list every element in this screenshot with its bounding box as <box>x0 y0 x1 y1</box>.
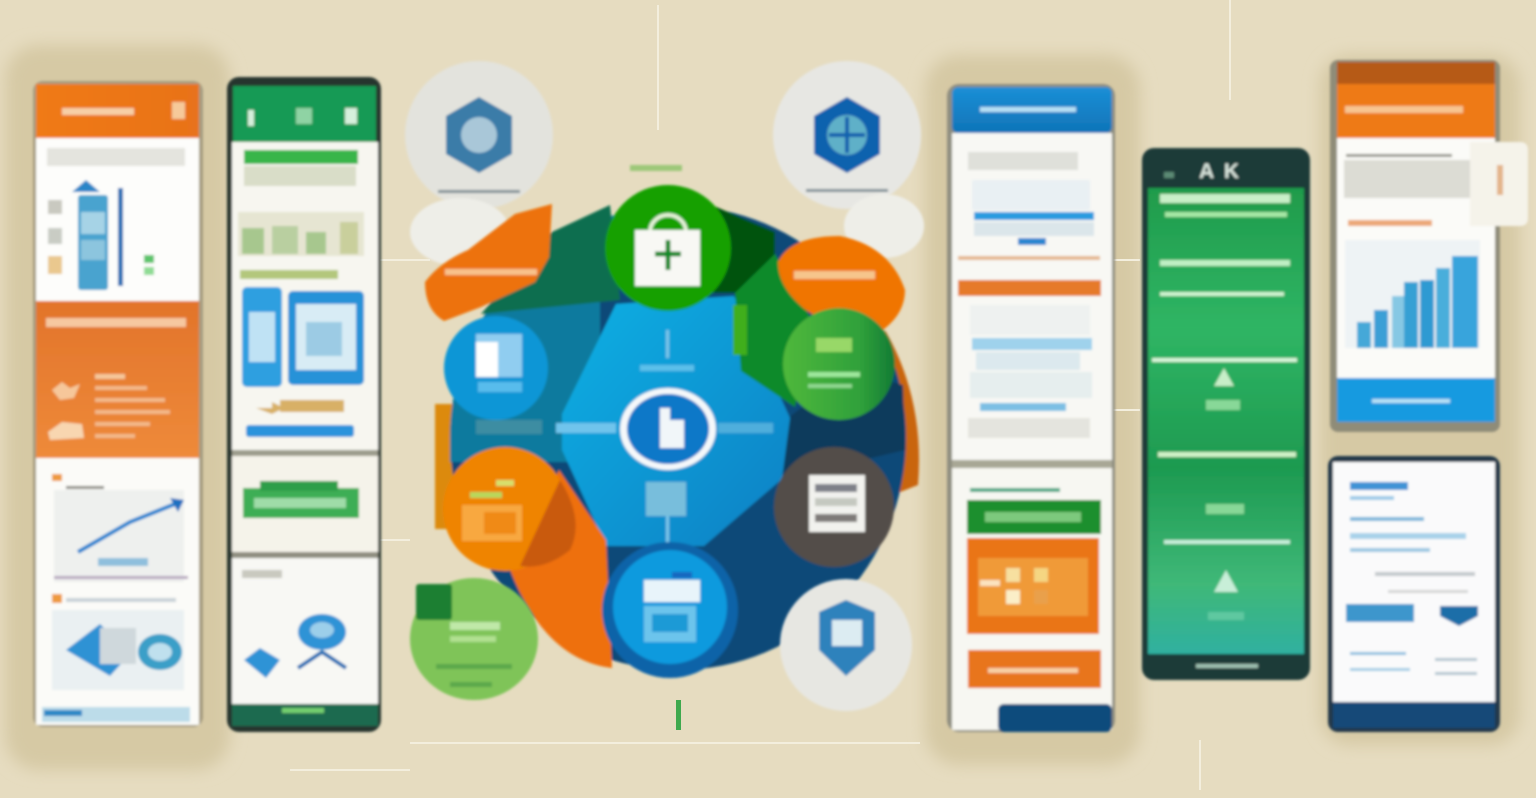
hub teal left half <box>450 206 678 462</box>
hub orange bottom rim <box>596 620 775 670</box>
icon badge: bottom right shield <box>780 579 912 711</box>
panel: right phone 1 <box>947 84 1115 732</box>
right phone 1 diagram <box>972 180 1094 245</box>
panel: far right top card <box>1330 60 1528 432</box>
hub dark green top-left sector <box>481 205 620 314</box>
far right header <box>1337 84 1495 138</box>
phone 1 device illustration <box>48 180 154 290</box>
marker: green tick <box>676 700 681 730</box>
far right text block <box>1344 154 1479 226</box>
hub navy right band <box>782 370 905 479</box>
phone 2 chart band <box>238 212 364 256</box>
right phone 2 icon row 2 <box>1208 570 1244 620</box>
node: blue left <box>444 316 548 420</box>
node: green right <box>783 308 895 420</box>
phone 1 header <box>36 84 199 138</box>
right phone 1 header <box>952 87 1112 133</box>
speech bubbles <box>410 194 924 266</box>
far right footer <box>1337 378 1495 422</box>
right phone 2 icon row 1 <box>1206 368 1240 410</box>
hub orange swirl <box>510 470 612 668</box>
phone 2 blue cards <box>242 287 364 387</box>
right phone 1 green bar <box>967 500 1101 534</box>
hub dark green top-right sector <box>700 200 775 293</box>
connector marks <box>666 330 669 358</box>
node: top green shield <box>605 165 731 311</box>
phone 1 line chart <box>54 490 188 582</box>
node: green bubble bottom left <box>410 578 538 700</box>
far right tab <box>1470 142 1528 226</box>
panel: left phone 1 <box>33 81 203 727</box>
icon badge: top left hexagon <box>405 61 553 209</box>
panel: left phone 2 <box>227 77 381 732</box>
phone 2 green button <box>243 481 359 518</box>
hub orange top-left blob <box>425 204 552 321</box>
right phone 1 orange table <box>967 538 1099 634</box>
hub green right sector <box>735 254 812 407</box>
far right bar chart <box>1345 240 1480 348</box>
node: orange folder <box>443 447 576 571</box>
icon badge: top right hexagon <box>773 61 921 209</box>
bottom card text <box>1350 517 1475 593</box>
phone 2 cloud icons <box>244 614 346 678</box>
right phone 1 button <box>968 650 1101 688</box>
hub orange left edge <box>435 404 455 529</box>
right phone 2 header text: AK <box>1199 160 1239 183</box>
bottom card title <box>1350 482 1408 500</box>
right phone 1 flow diagram <box>968 305 1092 438</box>
hub orange rim right <box>880 330 919 500</box>
hub center diamond <box>562 296 790 546</box>
central hub <box>425 165 919 678</box>
hub base sphere <box>450 206 906 670</box>
phone 2 header <box>233 86 376 142</box>
node: orange pill top right <box>778 236 905 332</box>
node: bottom blue <box>602 542 738 678</box>
node: center circle <box>620 388 716 470</box>
phone 1 list <box>48 374 170 440</box>
panel: right phone 2 green <box>1142 148 1310 680</box>
node: gray clipboard <box>774 447 894 567</box>
panel: far right bottom card <box>1328 456 1500 732</box>
faint connector lines <box>290 0 1230 790</box>
right phone 2 header text <box>1164 160 1239 183</box>
bottom card buttons <box>1346 604 1478 675</box>
phone 1 network illustration <box>52 610 184 690</box>
